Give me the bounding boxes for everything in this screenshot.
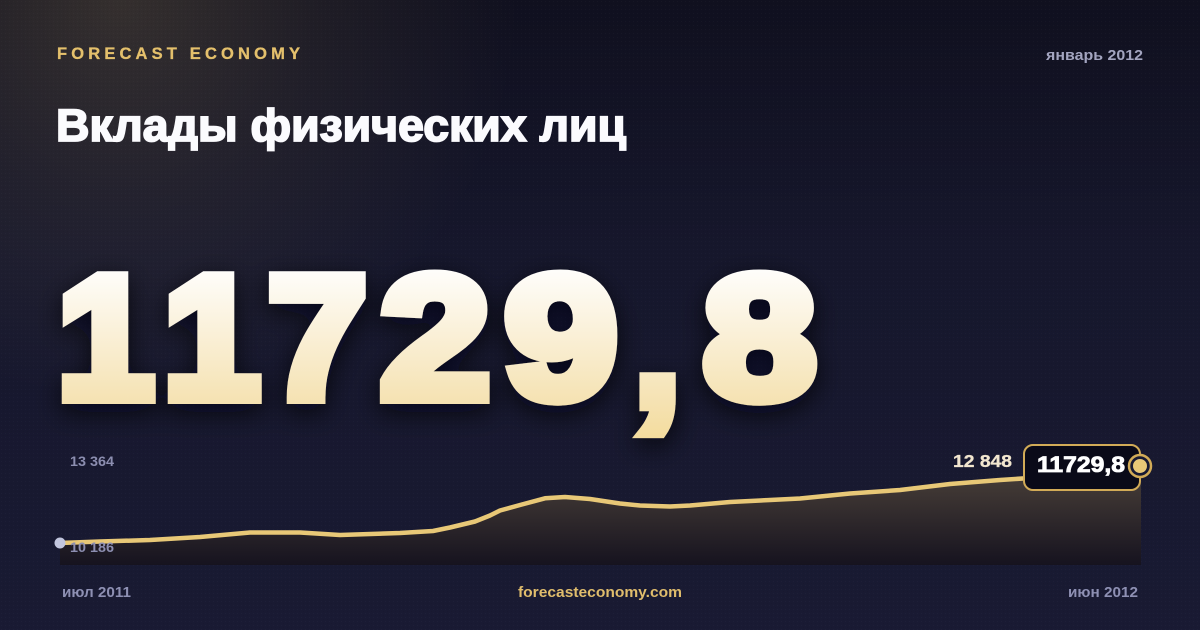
brand label: FORECAST ECONOMY [57, 45, 300, 63]
start dot [54, 538, 66, 548]
chart line [60, 478, 1030, 543]
start date: июл 2011 [62, 584, 131, 601]
current value marker [1129, 455, 1151, 477]
big number: 2 [380, 241, 490, 435]
area chart [54, 478, 1141, 565]
big number: 7 [268, 241, 367, 435]
chart area fill [60, 478, 1141, 565]
big number: 1 [163, 240, 260, 434]
big number [57, 240, 816, 442]
big number: 1 [57, 240, 154, 434]
end date: июн 2012 [1068, 584, 1138, 601]
axis max label: 13 364 [70, 454, 115, 469]
date: январь 2012 [1046, 47, 1143, 64]
big number: 9 [505, 241, 617, 435]
big number: 8 [703, 241, 816, 435]
current value callout: 11729,8 [1037, 452, 1125, 477]
big number: , [634, 248, 681, 442]
axis min label: 10 186 [70, 540, 115, 555]
current value callout [1024, 445, 1140, 490]
source url: forecasteconomy.com [518, 584, 682, 601]
title: Вклады физических лиц [56, 100, 626, 151]
peak label: 12 848 [953, 451, 1012, 471]
